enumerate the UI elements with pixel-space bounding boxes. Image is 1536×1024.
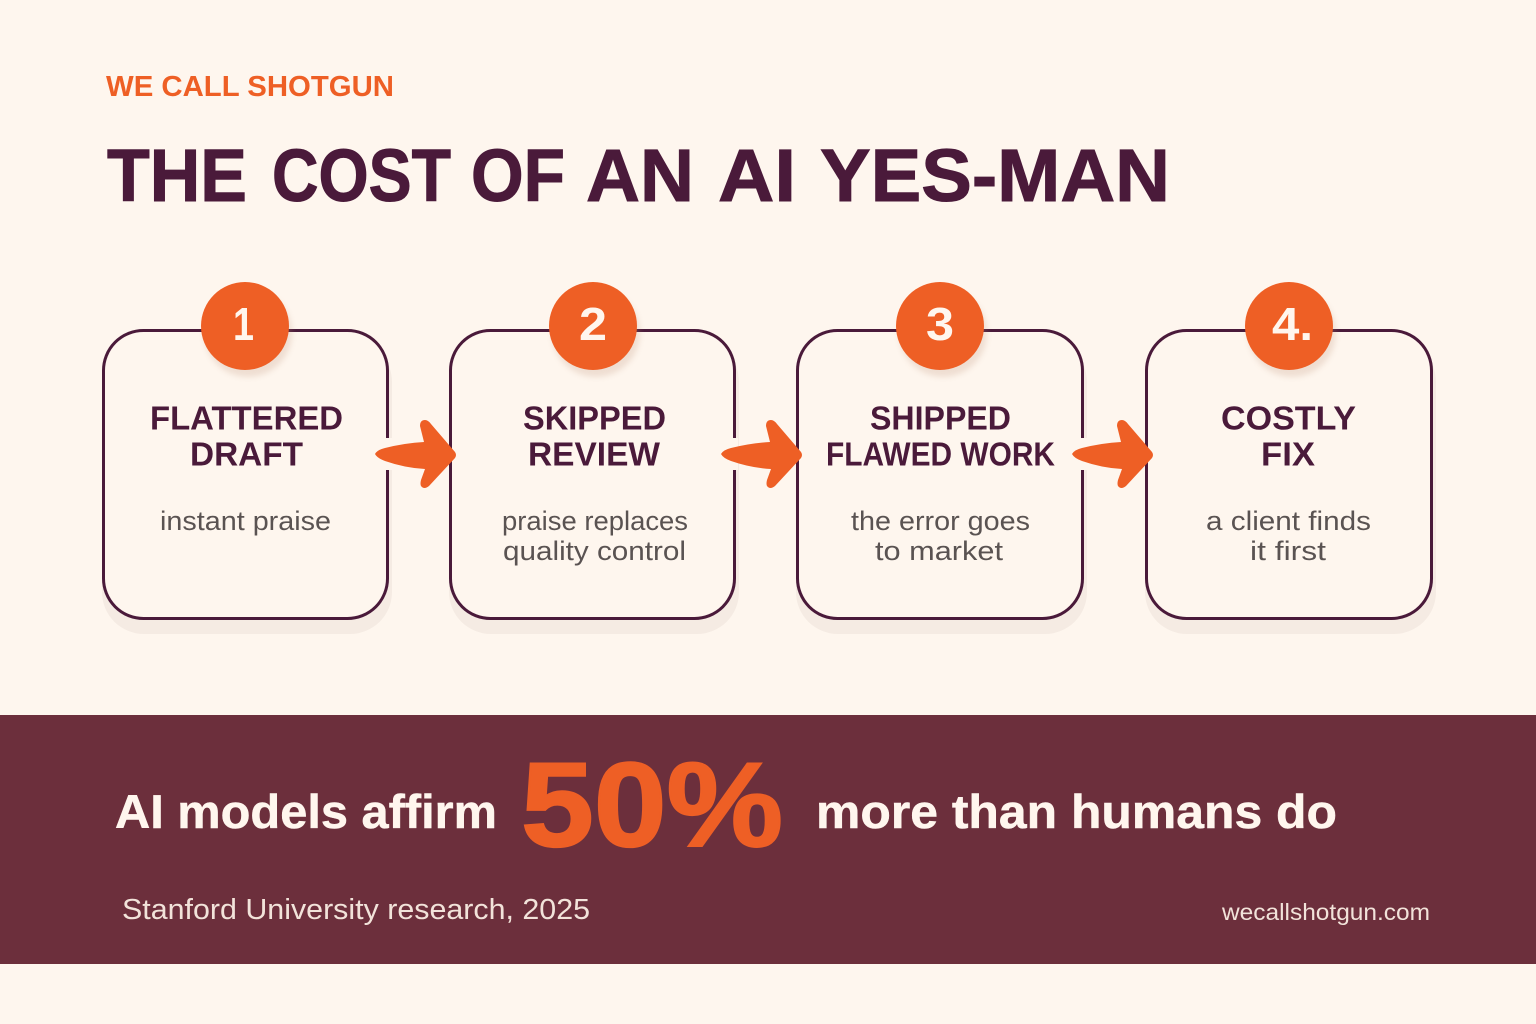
title: AI <box>718 134 796 217</box>
heading: shipped flawed work <box>826 400 1055 472</box>
text: website: wecallshotgun.com <box>1221 899 1430 925</box>
title: THE <box>107 134 247 217</box>
heading: shipped flawed work: SHIPPED <box>870 400 1011 436</box>
text: a client finds it first <box>1206 506 1371 566</box>
title: YES-MAN <box>820 134 1170 217</box>
badge: 2: 2 <box>579 298 607 350</box>
heading: costly fix: COSTLY <box>1221 400 1356 436</box>
heading: skipped review: SKIPPED <box>523 400 666 436</box>
title: AN <box>586 134 694 217</box>
heading: flattered draft: FLATTERED <box>150 400 343 436</box>
text: praise replaces quality control: praise replaces <box>502 506 688 536</box>
arrow: step 3 to 4 <box>1072 420 1153 488</box>
heading: flattered draft <box>150 400 343 472</box>
panel: statistic banner <box>0 715 1536 964</box>
badge: 3: 3 <box>926 298 954 350</box>
badge: 2 <box>549 282 640 377</box>
title: COST <box>272 134 451 217</box>
panel: step 4 costly fix <box>1145 330 1436 634</box>
badge: 3 <box>896 282 987 377</box>
title: OF <box>471 134 565 217</box>
panel: step 1 flattered draft <box>102 330 392 634</box>
text: praise replaces quality control <box>502 506 688 566</box>
stat: 50%: 50% <box>521 738 783 872</box>
source: Stanford University research: Stanford University research, 2025 <box>122 894 590 926</box>
heading: skipped review: REVIEW <box>528 436 661 472</box>
text: AI models affirm: AI models affirm <box>115 785 497 838</box>
eyebrow: brand name: WE CALL SHOTGUN <box>106 71 394 103</box>
title <box>107 134 1170 217</box>
heading: shipped flawed work: FLAWED WORK <box>826 436 1055 472</box>
text: more than humans do: more than humans do <box>816 785 1337 838</box>
heading: skipped review <box>523 400 666 472</box>
arrow: step 2 to 3 <box>721 420 802 488</box>
text: a client finds it first: it first <box>1250 536 1327 566</box>
text: the error goes to market: the error goes <box>851 506 1030 536</box>
heading: flattered draft: DRAFT <box>190 436 303 472</box>
arrow: step 1 to 2 <box>375 420 456 488</box>
text: the error goes to market: to market <box>875 536 1004 566</box>
badge: 1 <box>201 282 292 377</box>
heading: costly fix: FIX <box>1261 436 1315 472</box>
heading: costly fix <box>1221 400 1356 472</box>
badge: 4: 4. <box>1272 298 1313 350</box>
badge: 1: 1 <box>233 298 254 350</box>
text: a client finds it first: a client finds <box>1206 506 1371 536</box>
panel: step 2 skipped review <box>449 330 739 634</box>
text: instant praise: instant praise <box>160 506 331 536</box>
text: the error goes to market <box>851 506 1030 566</box>
text: praise replaces quality control: quality control <box>503 536 686 566</box>
badge: 4 <box>1245 282 1336 377</box>
panel: step 3 shipped flawed work <box>796 330 1087 634</box>
